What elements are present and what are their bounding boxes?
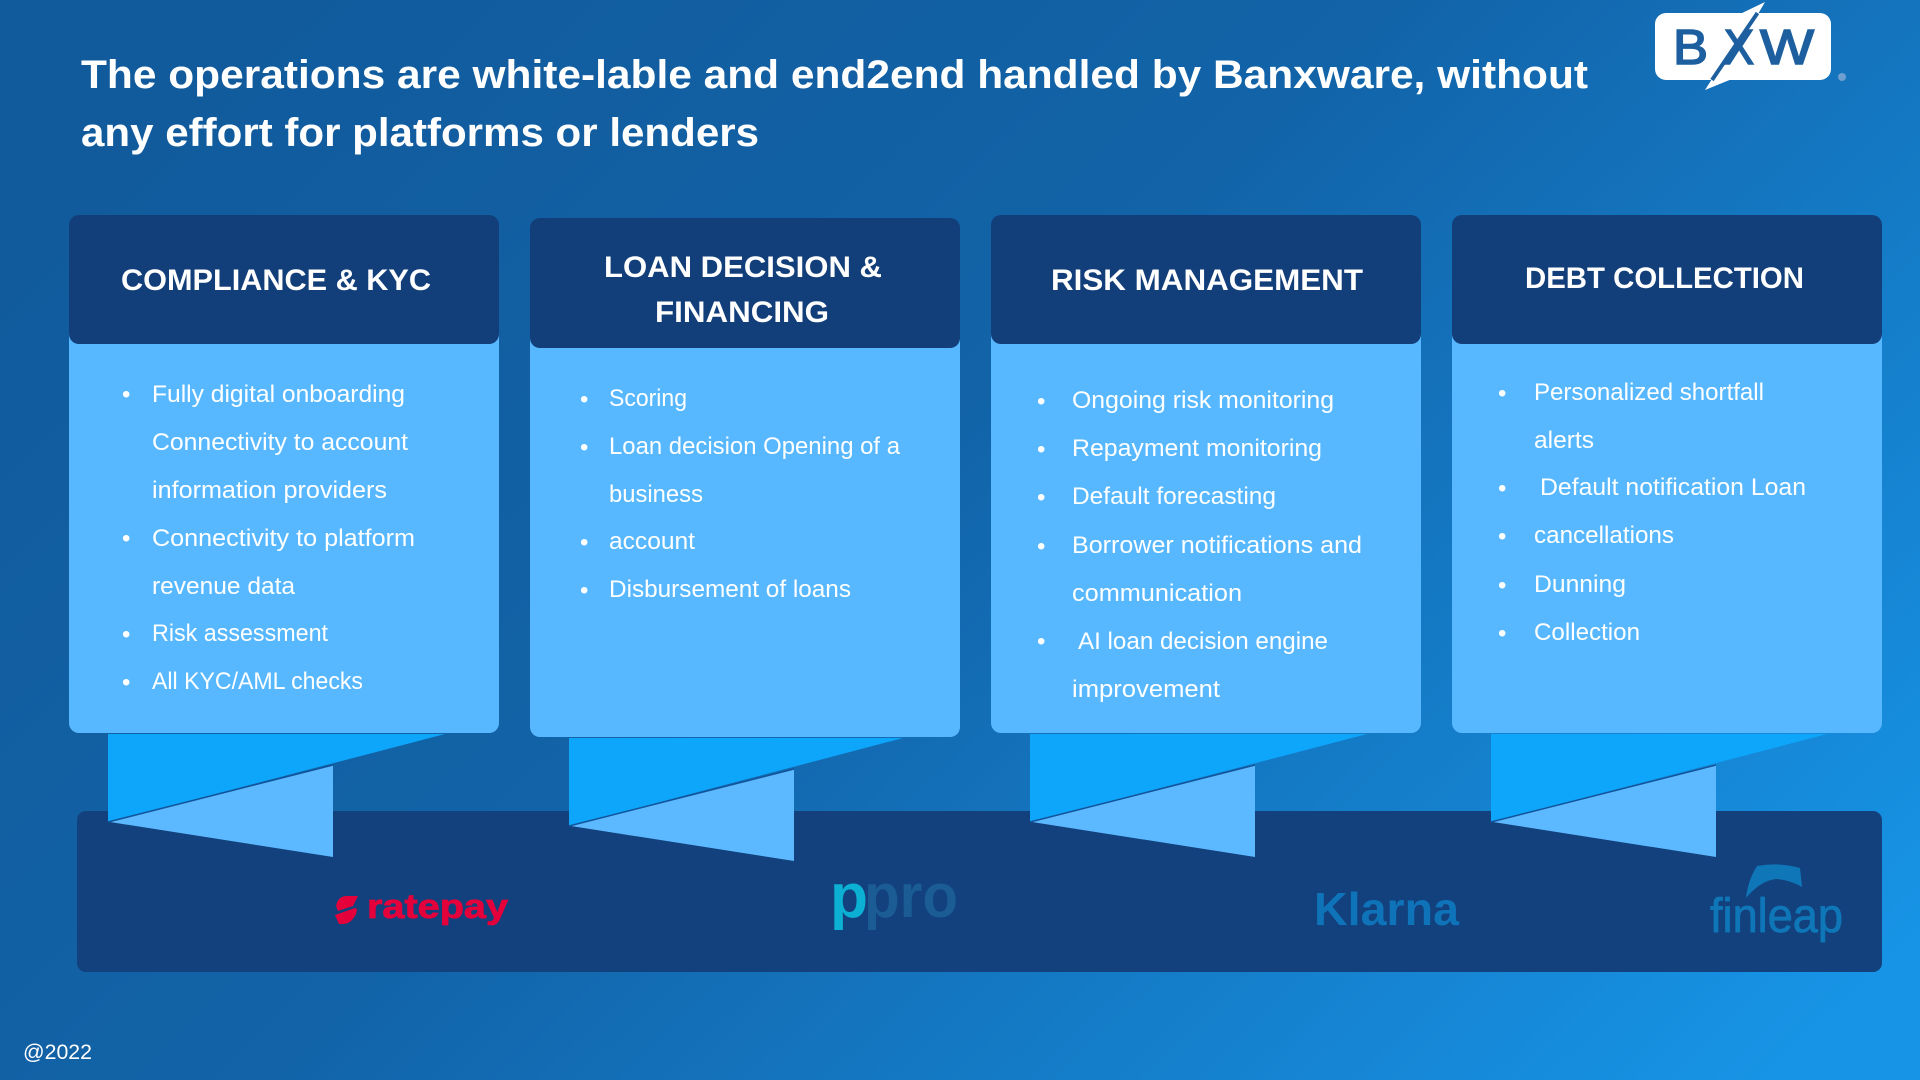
panel: compliance and KYC [69, 215, 499, 733]
list: risk management: • [1037, 628, 1045, 655]
heading: loan decision [604, 251, 882, 329]
list: compliance: Risk assessment [152, 620, 328, 647]
logo: ratepay [335, 888, 508, 926]
list: risk management: improvement [1072, 676, 1220, 703]
list: risk management [1037, 387, 1362, 703]
list: debt collection: • [1498, 523, 1506, 550]
logo: BXW: W [1760, 21, 1815, 75]
list: risk management: Borrower notifications and [1072, 532, 1362, 559]
list: debt collection: • [1498, 475, 1506, 502]
list: compliance: information providers [152, 477, 387, 504]
list: risk management: • [1037, 533, 1045, 560]
list: compliance: Connectivity to account [152, 429, 408, 456]
list: loan decision: • [580, 529, 588, 556]
list: compliance: • [122, 669, 130, 696]
logo: BXW: B [1673, 21, 1708, 75]
list: risk management: AI loan decision engine [1078, 628, 1328, 655]
heading: risk management: RISK MANAGEMENT [1051, 264, 1363, 297]
logo: BXW [1655, 2, 1846, 90]
logo: finleap: finleap [1710, 890, 1843, 943]
logo: ratepay: ratepay [367, 888, 508, 926]
list: loan decision: • [580, 386, 588, 413]
heading: debt collection: DEBT COLLECTION [1525, 262, 1804, 295]
title [81, 53, 1588, 155]
logo: ppro: pro [864, 862, 958, 931]
heading: compliance: COMPLIANCE & KYC [121, 264, 431, 297]
heading: loan decision: LOAN DECISION & [604, 251, 882, 284]
title: The operations are white-lable and end2end handled by Banxware, without [81, 53, 1588, 97]
list: loan decision: account [609, 528, 695, 555]
list: loan decision [580, 385, 901, 604]
heading: loan decision: FINANCING [655, 296, 829, 329]
list: risk management: Default forecasting [1072, 483, 1276, 510]
ribbon: compliance [108, 734, 445, 857]
list: compliance: Fully digital onboarding [152, 381, 405, 408]
logo: Klarna: Klarna [1314, 883, 1459, 935]
list: risk management: Ongoing risk monitoring [1072, 387, 1334, 414]
ribbon: loan decision [569, 738, 903, 861]
list: risk management: • [1037, 388, 1045, 415]
list: compliance: Connectivity to platform [152, 525, 415, 552]
list: risk management: • [1037, 436, 1045, 463]
title: any effort for platforms or lenders [81, 111, 759, 155]
panel: risk management [991, 215, 1421, 733]
list: debt collection: • [1498, 572, 1506, 599]
panel: debt collection [1452, 215, 1882, 733]
list: debt collection: Dunning [1534, 571, 1626, 598]
list: compliance: • [122, 621, 130, 648]
list: compliance: revenue data [152, 573, 296, 600]
ribbon: debt [1491, 734, 1827, 857]
list: loan decision: Scoring [609, 385, 687, 412]
list: debt collection: • [1498, 620, 1506, 647]
list: loan decision: • [580, 577, 588, 604]
list: risk management: • [1037, 484, 1045, 511]
list: loan decision: • [580, 434, 588, 461]
list: compliance: All KYC/AML checks [152, 668, 363, 695]
list: debt collection: alerts [1534, 427, 1594, 454]
panel: loan decision and financing [530, 218, 960, 737]
list: loan decision: Loan decision Opening of a [609, 433, 901, 460]
logo: BXW: X [1724, 21, 1754, 75]
logo: ppro: p [830, 862, 868, 931]
list: loan decision: Disbursement of loans [609, 576, 851, 603]
list: risk management: Repayment monitoring [1072, 435, 1322, 462]
list: debt collection: • [1498, 380, 1506, 407]
list: debt collection: Default notification Loan [1540, 474, 1806, 501]
ribbon: risk [1030, 734, 1367, 857]
list: compliance [122, 381, 415, 696]
list: risk management: communication [1072, 580, 1242, 607]
list: compliance: • [122, 525, 130, 552]
list: debt collection [1498, 379, 1806, 647]
list: debt collection: cancellations [1534, 522, 1674, 549]
list: compliance: • [122, 381, 130, 408]
logos band [77, 811, 1882, 972]
list: debt collection: Personalized shortfall [1534, 379, 1764, 406]
footer: copyright: @2022 [23, 1041, 92, 1064]
list: loan decision: business [609, 481, 703, 508]
logo: finleap [1710, 864, 1843, 943]
list: debt collection: Collection [1534, 619, 1640, 646]
